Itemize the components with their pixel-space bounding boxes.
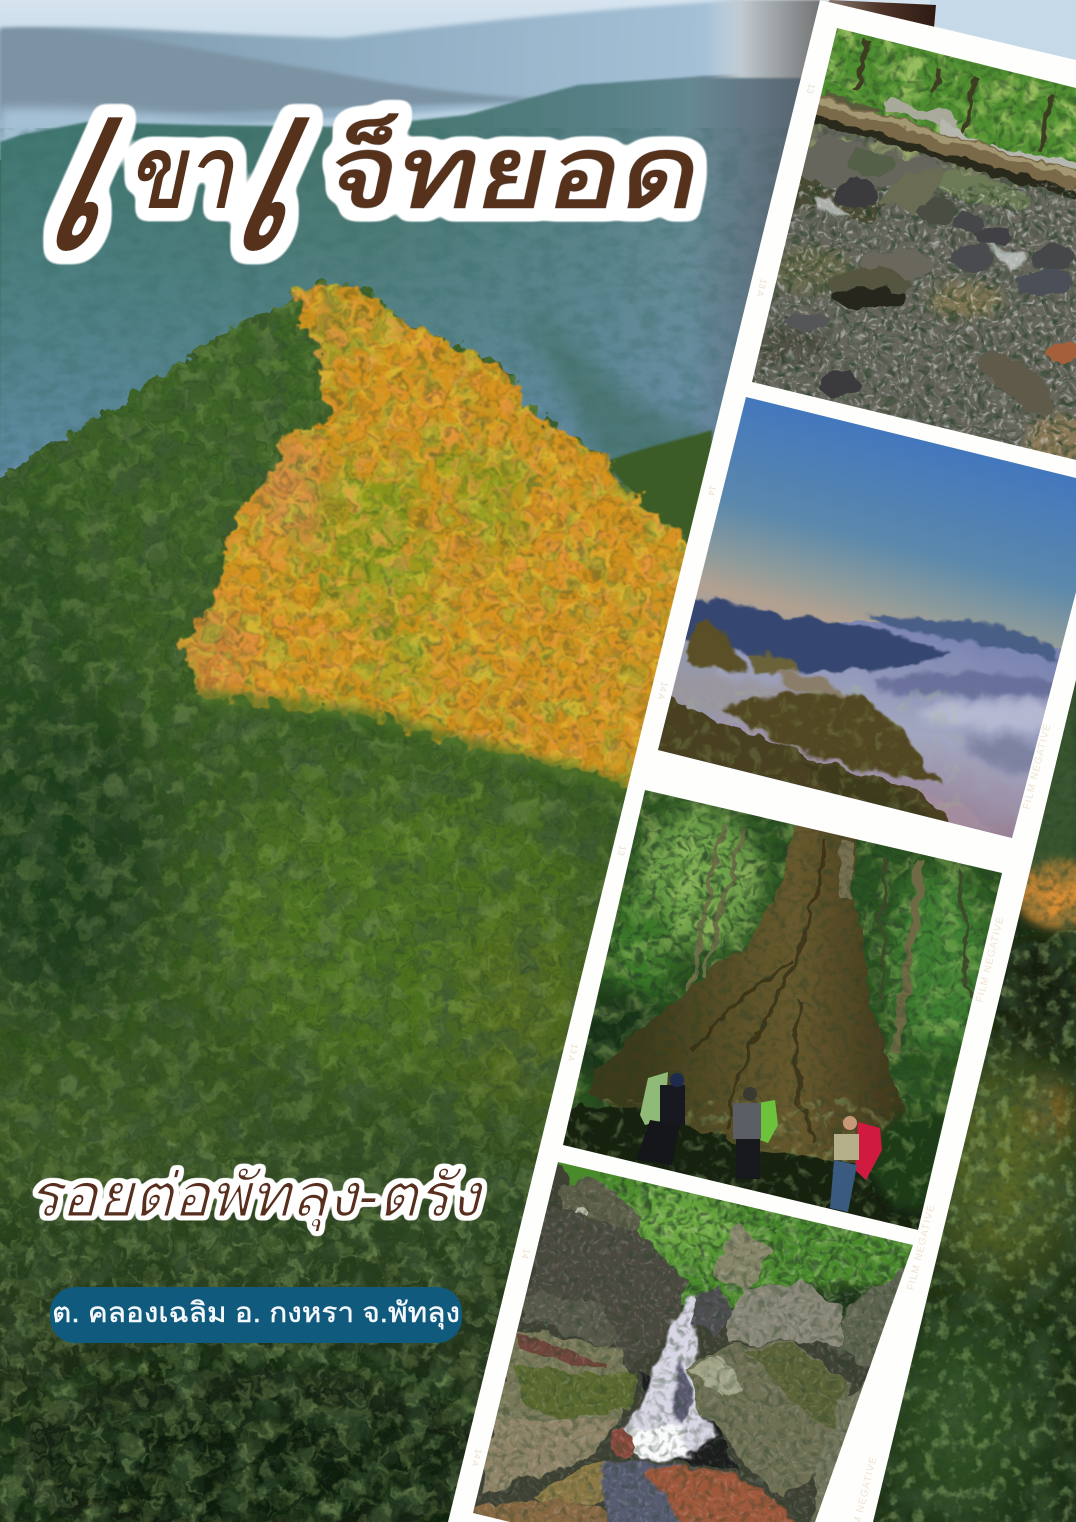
background: blue-green mountain range — [0, 68, 825, 520]
photo 4: waterfall and boulders — [473, 1162, 913, 1522]
title: ขา — [122, 117, 251, 229]
photo 3: giant tree and hikers — [563, 790, 1002, 1230]
photo 1: forest stream — [752, 28, 1076, 460]
frame number 13A lower: 13 A — [566, 1043, 580, 1063]
sunlit orange forest on peak — [170, 280, 720, 800]
title — [16, 40, 714, 297]
subtitle: รอยต่อพัทลุง-ตรัง — [28, 1162, 484, 1232]
film margin label: film negative 3: FILM NEGATIVE — [906, 1203, 938, 1292]
title: เ — [16, 40, 185, 297]
right side forest — [873, 682, 1076, 1522]
soft shadow edge below orange forest — [197, 694, 630, 788]
dark brown paper corner — [826, 0, 936, 28]
background: sky and distant mountains — [0, 0, 1076, 160]
frame number 13A: 13 A — [755, 278, 769, 298]
frame number 14A: 14 A — [656, 681, 670, 701]
frame number 14A lower: 14 A — [470, 1448, 484, 1468]
title: เ — [203, 40, 372, 297]
main hill — [0, 278, 686, 1522]
hikers — [636, 1072, 882, 1212]
frame number 14 lower: 14 — [520, 1248, 532, 1260]
film strip — [448, 0, 1076, 1522]
location pill: ต. คลองเฉลิม อ. กงหรา จ.พัทลุง — [52, 1297, 460, 1330]
film margin label: film negative 1: FILM NEGATIVE — [1022, 722, 1054, 811]
background: ridge behind peak — [605, 430, 712, 560]
fade shadow at top of strip — [705, 0, 822, 78]
frame number 13: 13 — [805, 83, 817, 95]
frame number 13 lower: 13 — [616, 845, 628, 857]
photo 2: sea of mist at dusk — [658, 397, 1076, 838]
location pill — [50, 1287, 462, 1343]
film margin label: film negative 2: FILM NEGATIVE — [975, 915, 1007, 1004]
title: จ็ทยอด — [317, 113, 714, 229]
frame number 14: 14 — [706, 485, 718, 497]
sky at upper right — [930, 0, 1076, 62]
